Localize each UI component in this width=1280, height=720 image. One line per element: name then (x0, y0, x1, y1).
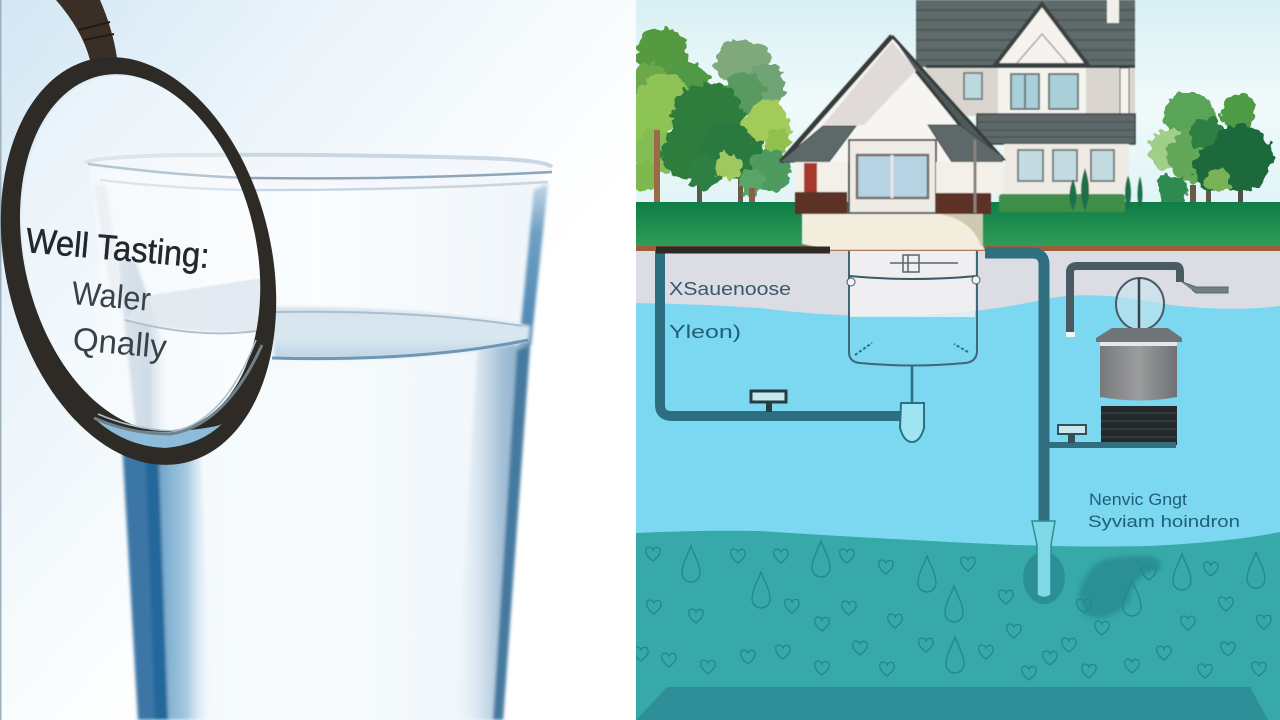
main wall (795, 162, 847, 194)
glass rim (85, 154, 552, 187)
left supply pipe and foot valve (656, 250, 924, 442)
door (804, 163, 817, 193)
sky (636, 0, 1280, 205)
magnified title text: Waler (70, 274, 152, 318)
upper storey wall (926, 66, 1135, 116)
main gable (798, 38, 958, 162)
grass (636, 202, 1280, 246)
underground layer (636, 251, 1280, 316)
magnified title text (24, 221, 211, 365)
magnified title text: Well Tasting: (24, 221, 211, 276)
right refraction strip (455, 345, 530, 720)
label: lower right: Syviam hoindron (1088, 512, 1240, 531)
porch awnings (780, 126, 856, 162)
panel: glass of water under magnifier (0, 0, 636, 720)
label: lower right (1088, 490, 1240, 531)
left wall (94, 185, 122, 300)
aquifer base band (636, 687, 1268, 720)
aquifer layer (636, 531, 1280, 720)
main well pipe (985, 253, 1065, 604)
porch railings (795, 192, 847, 214)
hedge (999, 194, 1125, 212)
upper roof (916, 0, 1135, 67)
shut-off valve (751, 391, 786, 402)
magnifier rim (0, 29, 315, 493)
magnified title text: Qnally (71, 320, 169, 365)
well ring (1023, 552, 1065, 604)
trees: left group (636, 26, 794, 202)
branch pipe (1049, 442, 1176, 448)
soil line (636, 246, 1280, 251)
pump valve (1058, 425, 1086, 434)
left refraction strip (158, 440, 212, 720)
pressure pump unit (1049, 266, 1228, 448)
water tank (847, 251, 980, 366)
magnifier handle (56, 0, 117, 60)
label: lower left: Yleon) (669, 322, 741, 342)
middle roof (977, 114, 1135, 144)
foundation (802, 214, 985, 250)
trees: right group (1149, 92, 1273, 215)
water surface (272, 307, 530, 359)
panel: well and house cross-section (570, 0, 1280, 720)
dark seepage plume (1079, 556, 1161, 618)
magnifying glass (0, 0, 315, 493)
dormer gable (995, 4, 1088, 65)
lens contents (0, 52, 296, 456)
chimney (1107, 0, 1119, 23)
lens bottom reflection (94, 340, 262, 448)
droplets and bubbles (570, 541, 1271, 680)
house (780, 0, 1142, 250)
label: lower right: Nenvic Gngt (1089, 490, 1187, 509)
glass of water (85, 154, 552, 720)
main window (857, 155, 928, 198)
upper windows (964, 73, 982, 99)
lower right wall (1004, 144, 1129, 194)
right wall (519, 184, 548, 345)
groundwater (636, 295, 1280, 560)
label: upper left: XSauenoose (669, 279, 791, 299)
